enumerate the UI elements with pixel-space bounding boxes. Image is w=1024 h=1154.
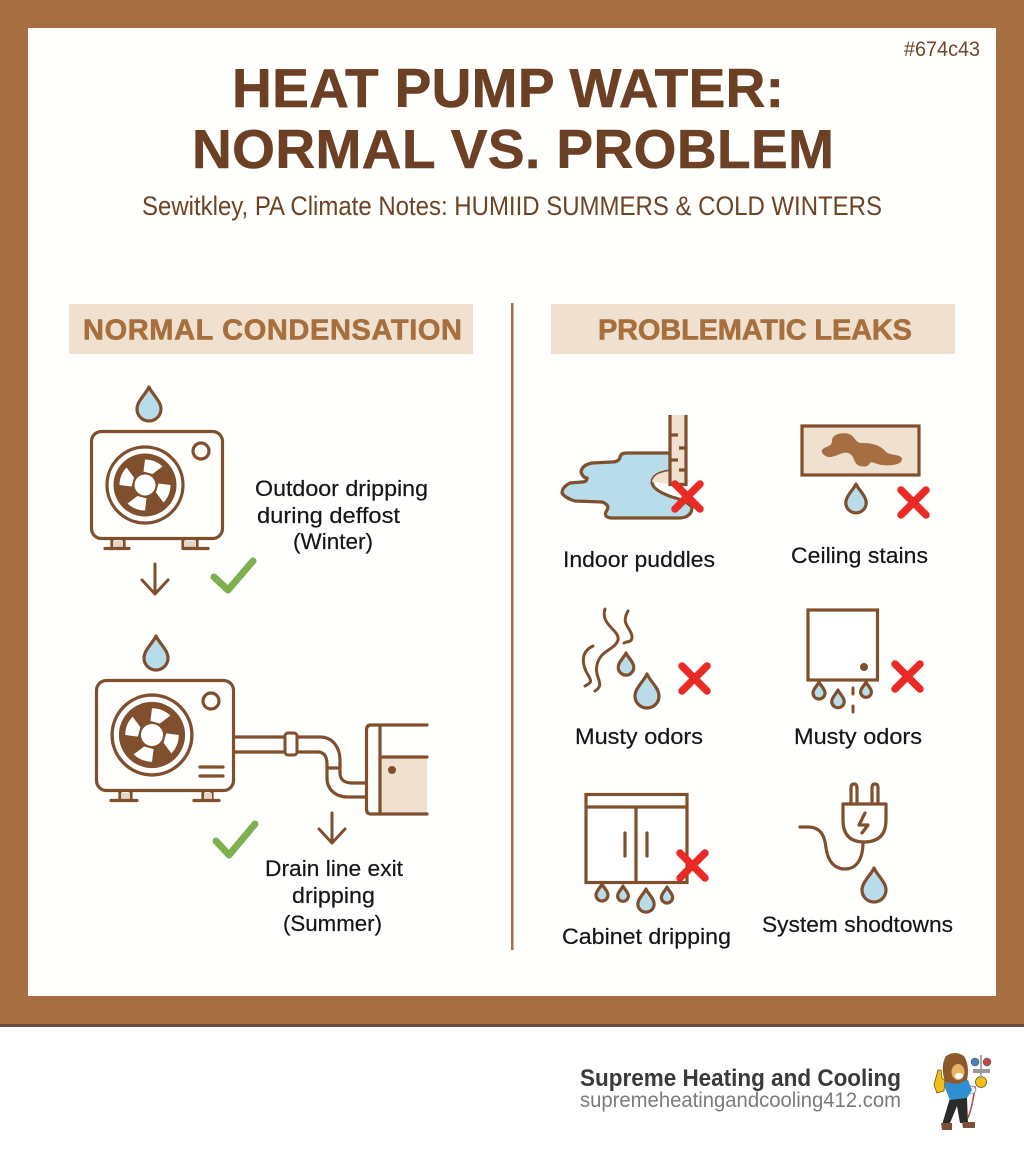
icon: indoor puddle <box>562 415 692 518</box>
title: HEAT PUMP WATER: <box>232 57 784 119</box>
gauges <box>971 1055 991 1079</box>
left glove <box>934 1070 945 1093</box>
label: musty odors: Musty odors <box>575 724 703 749</box>
x mark: musty odors <box>682 666 707 691</box>
sleeve <box>966 1086 976 1094</box>
white content panel <box>28 28 996 996</box>
face <box>952 1064 964 1080</box>
x mark: box <box>895 664 920 689</box>
heading: normal condensation <box>69 304 473 354</box>
muzzle <box>955 1073 963 1079</box>
icon: summer unit with drain line <box>96 636 427 814</box>
icon: cabinet <box>586 794 687 912</box>
label: system shodtowns: System shodtowns <box>762 912 953 937</box>
icon: ceiling stain <box>802 426 919 513</box>
heading: normal condensation: NORMAL CONDENSATION <box>83 314 462 346</box>
mane <box>943 1053 968 1084</box>
arrow: summer down <box>319 813 345 843</box>
icon: dripping box <box>808 610 878 712</box>
colour code label: #674c43 <box>904 38 980 61</box>
heading: problematic leaks: PROBLEMATIC LEAKS <box>598 314 912 346</box>
icon: winter outdoor unit <box>92 387 222 548</box>
legs <box>942 1098 968 1125</box>
text: drain line <box>265 856 403 936</box>
label: ceiling stains: Ceiling stains <box>791 543 928 568</box>
footer brand name: Supreme Heating and Cooling <box>580 1065 901 1092</box>
indoor cabinet <box>380 757 427 814</box>
x mark: cabinet <box>680 853 705 878</box>
x mark: puddle <box>675 484 700 509</box>
text: drain line: Drain line exit <box>265 856 403 881</box>
footer divider line <box>0 1024 1024 1027</box>
subtitle: Sewitkley, PA Climate Notes: HUMIID SUMMERS & COLD WINTERS <box>142 191 882 221</box>
icon: musty odors <box>583 609 659 708</box>
arrow: winter down <box>142 564 168 594</box>
label: indoor puddles: Indoor puddles <box>563 547 715 572</box>
x mark: ceiling <box>901 490 926 515</box>
check: winter <box>214 561 253 590</box>
title: NORMAL VS. PROBLEM <box>192 118 834 180</box>
shirt <box>945 1080 972 1100</box>
shoes <box>941 1122 975 1130</box>
center divider <box>511 303 514 950</box>
text: outdoor dripping: Outdoor dripping <box>255 476 428 501</box>
label: musty odors second: Musty odors <box>794 724 922 749</box>
drain pipe <box>234 737 366 797</box>
mascot: lion technician <box>934 1053 991 1130</box>
label: cabinet dripping: Cabinet dripping <box>562 924 731 949</box>
text: drain line: (Summer) <box>283 911 382 936</box>
text: outdoor dripping: (Winter) <box>293 529 373 554</box>
heading: problematic leaks <box>551 304 955 354</box>
title <box>192 57 834 180</box>
hose <box>968 1086 975 1118</box>
check: summer <box>216 824 255 855</box>
icon: plug <box>800 784 886 902</box>
text: drain line: dripping <box>292 883 375 908</box>
right glove <box>976 1076 986 1088</box>
footer website: supremeheatingandcooling412.com <box>580 1089 901 1112</box>
text: outdoor dripping: during deffost <box>257 503 400 528</box>
text: outdoor dripping <box>255 476 428 554</box>
